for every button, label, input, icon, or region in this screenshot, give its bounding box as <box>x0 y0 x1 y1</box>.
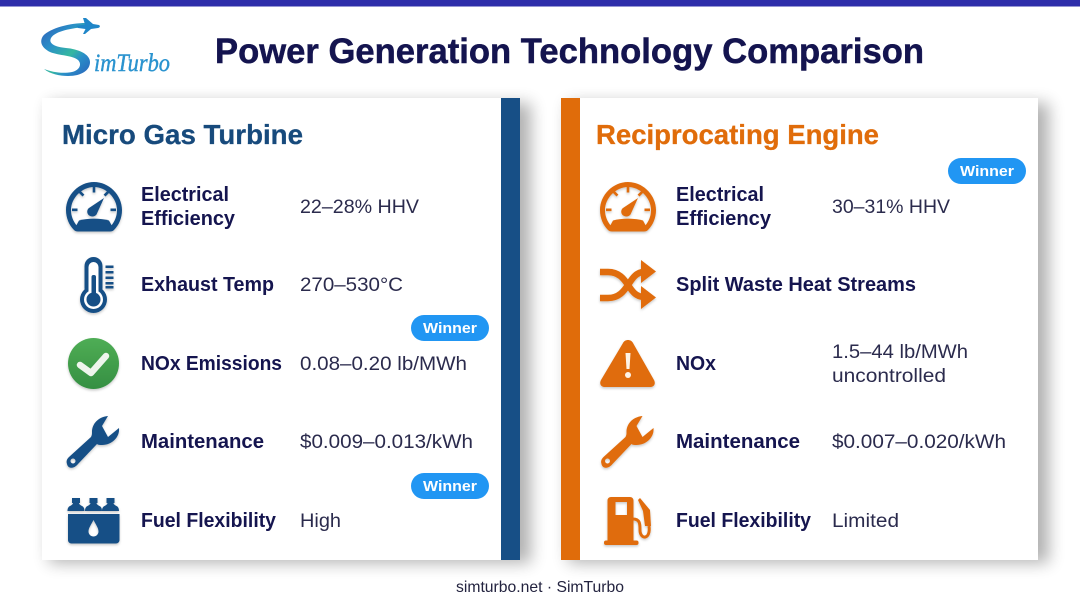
panel heading: Micro Gas Turbine <box>62 119 303 150</box>
icon: warning triangle <box>600 340 655 387</box>
label: Maintenance <box>676 431 800 453</box>
icon: shuffle arrows <box>600 260 656 309</box>
label: Electrical <box>676 184 764 206</box>
value: $0.007–0.020/kWh <box>832 432 1006 453</box>
panel card <box>561 98 1038 560</box>
label: Electrical <box>141 184 229 206</box>
label: Maintenance <box>141 431 264 453</box>
value: 22–28% HHV <box>300 197 419 218</box>
icon: green check <box>68 338 119 389</box>
icon: gauge <box>66 182 122 232</box>
winner badge: Winner <box>960 163 1014 180</box>
value: 1.5–44 lb/MWh <box>832 342 968 363</box>
panel: Reciprocating Engine <box>561 98 1049 563</box>
row: fuel flexibility <box>68 473 489 544</box>
row: electrical efficiency <box>66 182 419 232</box>
panel shadow <box>49 103 531 563</box>
panel: Micro Gas Turbine <box>42 98 531 563</box>
row: NOx emissions <box>68 315 489 389</box>
label: Fuel Flexibility <box>676 510 812 532</box>
panel shadow <box>568 103 1049 563</box>
label: NOx <box>676 353 716 375</box>
panel accent bar <box>561 98 580 560</box>
value: uncontrolled <box>832 366 946 387</box>
winner badge <box>948 158 1026 184</box>
label: Efficiency <box>141 208 236 230</box>
label: NOx Emissions <box>141 353 282 375</box>
value: 0.08–0.20 lb/MWh <box>300 354 467 375</box>
logo: SimTurbo <box>41 18 170 77</box>
label: Fuel Flexibility <box>141 510 277 532</box>
row: NOx <box>600 340 968 387</box>
row: electrical efficiency <box>600 158 1026 232</box>
winner badge: Winner <box>423 320 477 337</box>
row: fuel flexibility <box>604 497 899 545</box>
icon: fuel pump <box>604 497 651 545</box>
label: Exhaust Temp <box>141 274 274 296</box>
icon: S swoosh with plane <box>41 18 100 76</box>
icon: wrench <box>601 416 654 468</box>
value: $0.009–0.013/kWh <box>300 432 473 453</box>
winner badge <box>411 473 489 499</box>
value: 30–31% HHV <box>832 197 950 218</box>
value: High <box>300 511 341 532</box>
row: maintenance <box>601 416 1006 468</box>
value: Limited <box>832 511 899 532</box>
label: Split Waste Heat Streams <box>676 274 916 296</box>
row: maintenance <box>67 416 473 468</box>
panel accent bar <box>501 98 520 560</box>
logo wordmark: imTurbo <box>94 50 170 77</box>
title: Power Generation Technology Comparison <box>215 32 924 71</box>
icon: thermometer <box>80 257 114 313</box>
footer: simturbo.net · SimTurbo <box>456 579 624 596</box>
top bar <box>0 0 1080 6</box>
winner badge <box>411 315 489 341</box>
icon: fuel tanks <box>68 498 120 544</box>
icon: gauge <box>600 182 656 232</box>
icon: wrench <box>67 416 119 468</box>
value: 270–530°C <box>300 275 403 296</box>
panel heading: Reciprocating Engine <box>596 119 879 150</box>
row: split waste heat streams <box>600 260 916 309</box>
winner badge: Winner <box>423 478 477 495</box>
row: exhaust temp <box>80 257 403 313</box>
label: Efficiency <box>676 208 772 230</box>
panel card <box>42 98 520 560</box>
